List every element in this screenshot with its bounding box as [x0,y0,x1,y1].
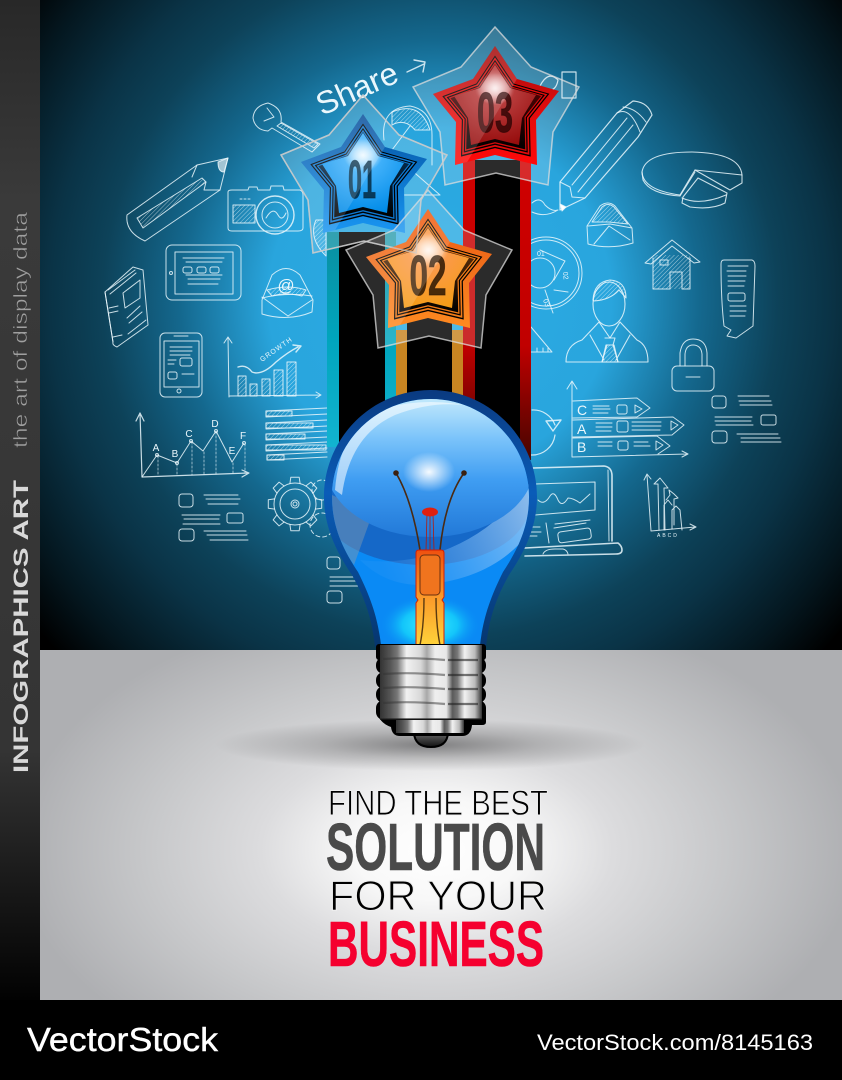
brand name: INFOGRAPHICS ART [10,480,33,773]
icon: padlock [672,339,714,391]
footer strip [0,1000,842,1080]
bulb glass interior [332,399,529,644]
chart: donut: 02 [561,272,569,280]
icon: businessman [566,280,648,362]
icon: circular arrow [531,410,561,455]
sketch icons [105,55,781,603]
chart: growth: GROWTH [259,336,294,364]
chart: arrow bars C A B: A [577,421,587,437]
icon: tablet [166,245,241,300]
star 01 badge: 01 [348,150,376,210]
star 02 pillar [396,270,463,445]
footer logo: VectorStock [27,1021,219,1058]
filament stem [416,550,444,645]
chart: line chart A to F: E [229,446,236,457]
chart: growth [224,336,321,398]
chart: line chart A to F: F [240,431,246,442]
icon: speech bubble [721,260,755,338]
chart: arrow bars C A B [567,381,688,457]
chart: line chart A to F: B [172,449,179,460]
icon: gears [268,477,334,537]
chart: line chart A to F: D [211,419,219,430]
text blocks lower left [179,494,248,541]
headline [326,784,548,980]
icon: house [645,240,700,289]
star 02 badge [346,190,512,348]
icon: book [105,267,148,347]
blue background wall [40,0,842,650]
icon: closed envelope [587,203,633,247]
text blocks right [712,396,781,443]
icon: right pencil [560,101,652,211]
icon: camera [228,186,303,234]
sketches behind stars [314,72,576,256]
icon: envelope with at sign [262,268,313,318]
tagline: the art of display data [11,211,32,448]
chart: hatched horizontal bars [266,408,327,460]
chart: line chart A to F: A [153,443,160,454]
chart: arrow bars C A B: C [577,402,587,418]
star 03 pillar [463,160,531,460]
bulb glass outline [324,390,537,647]
screw base [376,644,486,747]
chart: donut: 03 [541,298,550,308]
headline line 3: FOR YOUR [329,872,547,919]
share word with arrow: Share [310,55,403,122]
star 02 badge: 02 [410,244,446,308]
icon: envelope with at sign: @ [277,276,295,295]
chart: pie [642,152,742,208]
headline line 2: SOLUTION [326,810,545,885]
light bulb [321,390,537,747]
star 01 pillar [327,232,396,447]
headline line 4: BUSINESS [328,908,544,980]
chart: donut: 01 [537,251,545,258]
icon: laptop with chart [525,466,622,556]
star 01 glass edge over star 02 [281,95,447,253]
chart: arrow bars C A B: B [577,439,586,455]
left side bar [0,0,40,1000]
headline line 1: FIND THE BEST [328,784,548,823]
chart: small arrow chart [644,474,696,539]
footer url: VectorStock.com/8145163 [537,1030,813,1055]
chart: line chart A to F [136,413,249,477]
chart: donut [510,237,582,313]
star 01 badge [281,95,447,253]
star 03 badge: 03 [477,81,513,145]
star 03 badge [413,27,579,185]
chart: line chart A to F: C [185,429,193,440]
filament wires [393,470,467,550]
icon: smartphone [160,333,202,397]
text blocks under gears [327,557,364,603]
floor shadow [215,719,645,771]
icon: ruler triangle [531,327,552,352]
grey floor [40,650,842,1000]
icon: left pencil [127,158,228,241]
icon: wrench [253,103,320,152]
chart: small arrow chart: ABCD [657,533,679,539]
